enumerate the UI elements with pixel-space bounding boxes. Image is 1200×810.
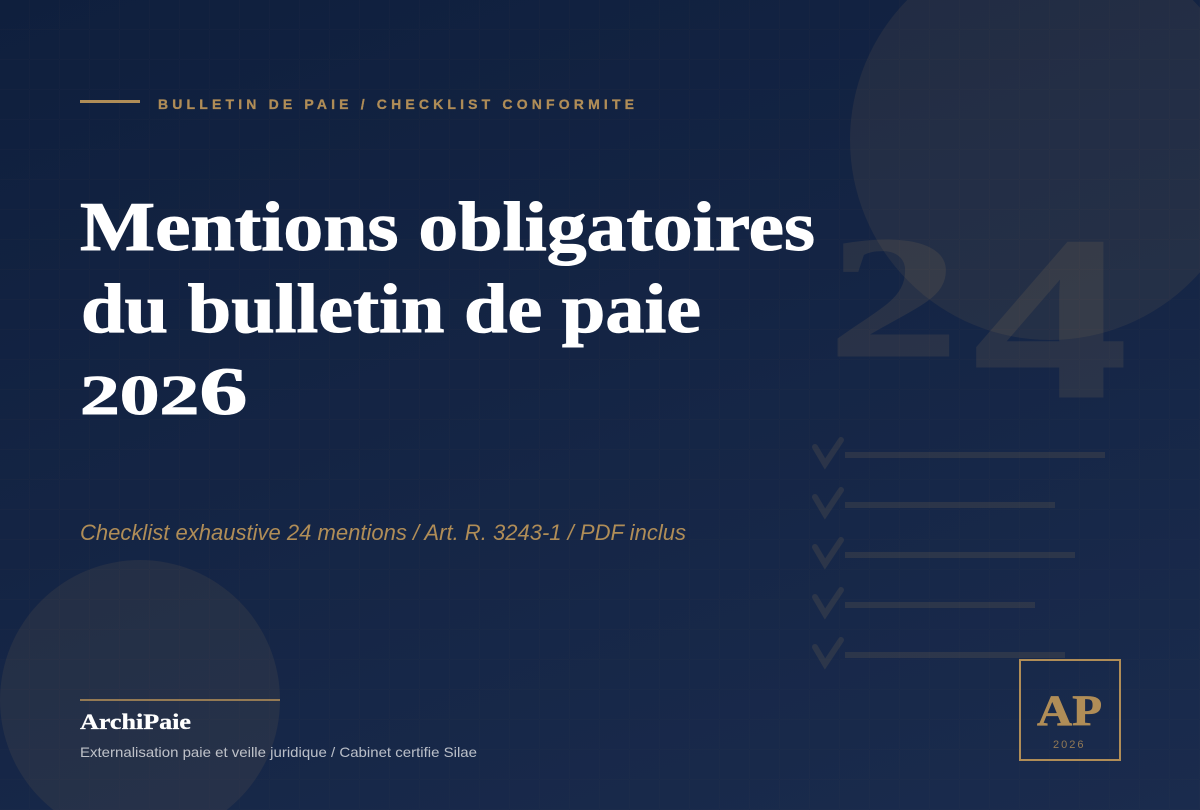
large decorative number 24: 4 <box>974 190 1127 447</box>
brand footer: ArchiPaie <box>80 709 191 734</box>
checklist row 5 <box>815 640 1065 664</box>
checklist row 4 <box>815 590 1035 614</box>
checklist row 2 <box>815 490 1055 514</box>
large decorative number 24: 2 <box>829 203 958 393</box>
title <box>80 189 815 429</box>
brand footer: Externalisation paie et veille juridique / Cabinet certifie Silae <box>80 744 477 760</box>
title: 2026 <box>80 355 248 429</box>
checklist row 3 <box>815 540 1075 564</box>
title: Mentions obligatoires <box>80 189 815 266</box>
decorative checklist <box>815 440 1105 664</box>
AP logo badge <box>1020 660 1120 760</box>
checklist row 1 <box>815 440 1105 464</box>
eyebrow header: BULLETIN DE PAIE / CHECKLIST CONFORMITE <box>158 96 637 112</box>
title: du bulletin de paie <box>81 271 701 348</box>
brand footer <box>80 699 477 760</box>
subtitle: Checklist exhaustive 24 mentions / Art. R. 3243-1 / PDF inclus <box>80 520 686 545</box>
AP logo badge: 2026 <box>1053 739 1085 751</box>
AP logo badge: AP <box>1037 688 1102 735</box>
